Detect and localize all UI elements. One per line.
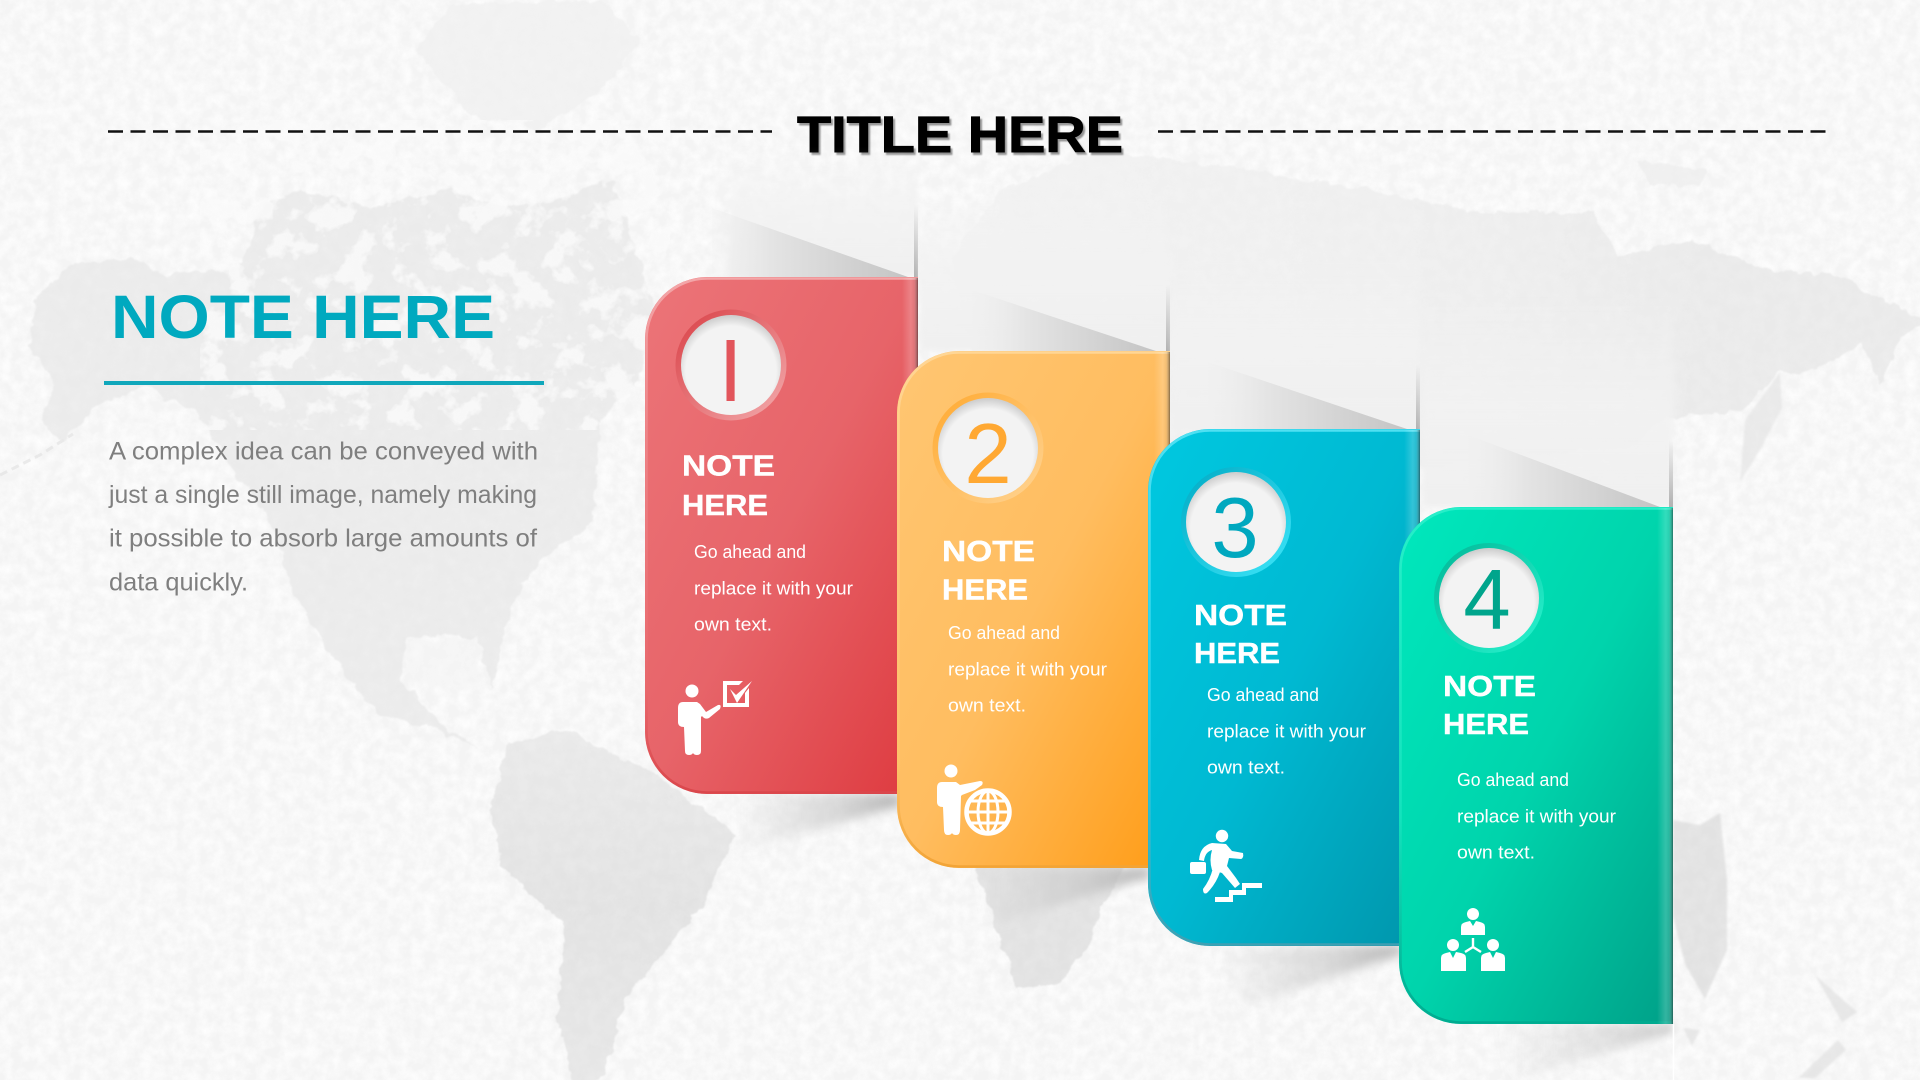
paper fold: card 4 [1422,300,1673,507]
shadow under card 4 [1494,1024,1673,1080]
card 3 heading: NOTE [1194,600,1287,632]
number badge 1: 1 [701,319,756,431]
map: Sea of Japan shade [1740,372,1782,482]
map: Australia [1673,813,1727,999]
map: Gulf of Mexico [405,638,480,690]
shadow under card 3 [1215,946,1402,1008]
left note paragraph: it possible to absorb large amounts of [109,524,537,552]
shadow under card 2 [975,868,1150,926]
paper fold: card 2 [920,190,1170,351]
paper edge below card 4 [1672,1024,1674,1080]
card 1 heading: NOTE [682,450,775,482]
card 4 heading: HERE [1443,709,1529,741]
title: dashed rule left [108,130,772,133]
number badge 1 [676,310,786,431]
title: dashed rule right [1158,130,1827,133]
card 4 heading: NOTE [1443,671,1536,703]
card 1 heading: HERE [682,490,768,522]
left note paragraph: just a single still image, namely making [108,481,537,509]
card 1 text: own text. [694,614,772,634]
shadow under card 1 [735,794,900,852]
map: North America [30,180,655,750]
number badge 3: 3 [1211,481,1259,576]
paper fold: card 3 [1172,250,1420,429]
panel: card 2 (orange) [897,351,1170,868]
left note underline [104,381,544,385]
card 4 heading [1443,671,1536,741]
icon: presenter with checkbox [678,681,752,755]
map: Greenland [416,0,640,130]
map: Aleutian islands [0,434,73,475]
card 4 text: Go ahead and [1457,770,1569,790]
number badge 4: 4 [1463,553,1511,648]
number badge 2 [932,392,1044,504]
card 2 text: replace it with your [948,660,1107,680]
card 3 text: replace it with your [1207,722,1366,742]
number badge 4 [1434,543,1544,653]
card 3 text [1207,685,1366,778]
panel: card 3 (blue) [1148,429,1420,946]
left note paragraph [108,438,538,596]
card 1 heading [682,450,775,522]
card 2 text: own text. [948,696,1026,716]
left note paragraph: A complex idea can be conveyed with [109,438,538,466]
panel: card 1 (red) [645,277,918,794]
card 1 text: replace it with your [694,578,853,598]
card 3 heading: HERE [1194,638,1280,670]
left note panel [104,283,544,596]
card 1 text: Go ahead and [694,542,806,562]
card 2 heading [942,536,1035,606]
map: Canadian lakes [200,190,648,430]
card 3 heading [1194,600,1287,670]
panel: card 4 (green) [1399,507,1673,1024]
map: Africa [960,700,1130,990]
card 4 text: own text. [1457,842,1535,862]
map: South America [490,730,735,1080]
card 4 text: replace it with your [1457,806,1616,826]
icon: runner on stairs [1190,830,1262,902]
number badge 2: 2 [964,407,1012,502]
icon: presenter with globe [937,764,1010,835]
card 3 text: Go ahead and [1207,685,1319,705]
title: TITLE HERE [797,106,1123,163]
card 4 text [1457,770,1616,862]
card 2 heading: HERE [942,574,1028,606]
left note paragraph: data quickly. [109,568,248,596]
card 2 text: Go ahead and [948,623,1060,643]
map: New Zealand [1683,975,1857,1078]
left note heading: NOTE HERE [111,283,495,351]
number badge 3 [1181,467,1291,577]
paper fold: card 1 [712,150,918,277]
card 2 text [948,623,1107,716]
card 2 heading: NOTE [942,536,1035,568]
card 1 text [694,542,853,634]
icon: team hierarchy [1441,908,1505,971]
map: Eurasia [950,150,1920,470]
card 3 text: own text. [1207,758,1285,778]
